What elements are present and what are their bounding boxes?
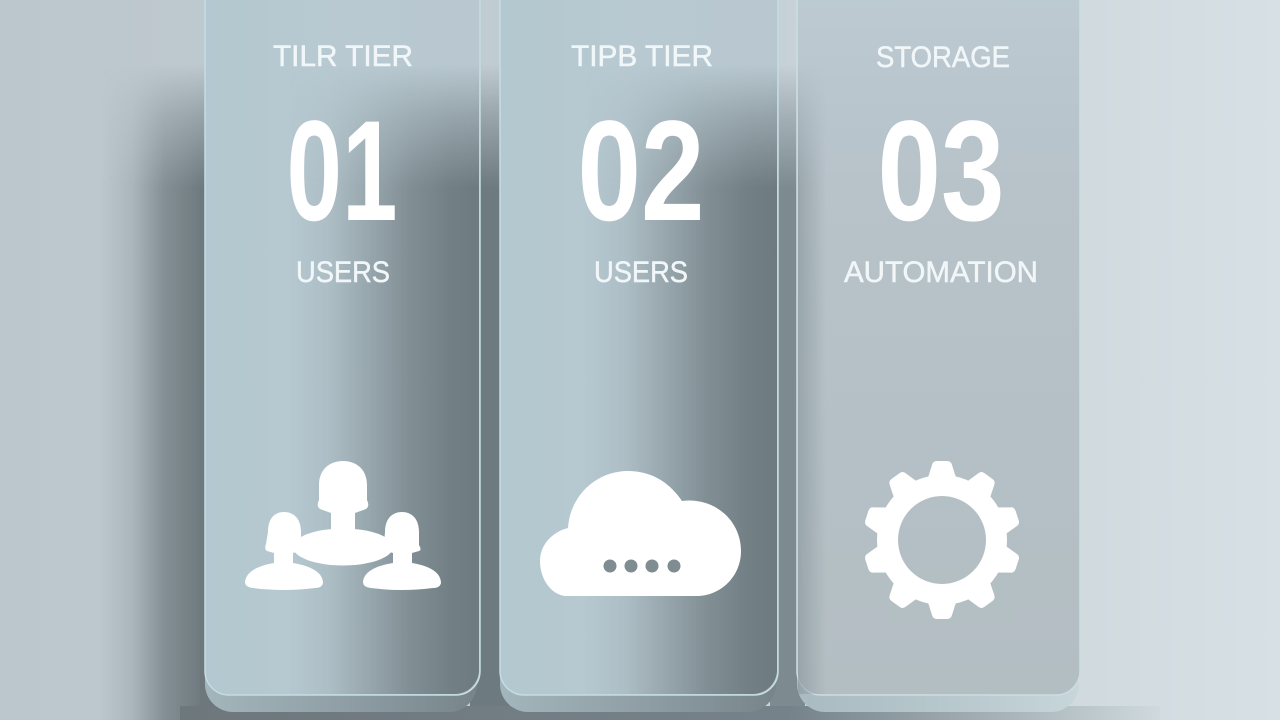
label: USERS bbox=[296, 256, 390, 289]
card face bbox=[205, 0, 480, 695]
label: AUTOMATION bbox=[844, 256, 1038, 289]
number: 01 bbox=[286, 92, 398, 251]
icon: group of users bbox=[245, 461, 441, 590]
shadow between cards bbox=[180, 74, 1140, 720]
heading: TILR TIER bbox=[273, 40, 413, 73]
number: 03 bbox=[878, 92, 1004, 251]
panel 1: users tier bbox=[205, 0, 480, 712]
panel shadow: left of first card bbox=[113, 74, 204, 720]
heading: TIPB TIER bbox=[571, 40, 713, 73]
card lip bbox=[797, 600, 1079, 712]
card face bbox=[797, 0, 1080, 695]
card lip bbox=[205, 600, 477, 712]
icon: gear bbox=[862, 461, 1022, 619]
panel 2: storage tier bbox=[500, 0, 778, 712]
icon: cloud bbox=[540, 471, 741, 596]
panel 3: automation bbox=[797, 0, 1080, 712]
number: 02 bbox=[578, 92, 704, 251]
heading: STORAGE bbox=[876, 41, 1010, 74]
label: USERS bbox=[594, 256, 688, 289]
card lip bbox=[500, 600, 776, 712]
card face bbox=[500, 0, 778, 695]
